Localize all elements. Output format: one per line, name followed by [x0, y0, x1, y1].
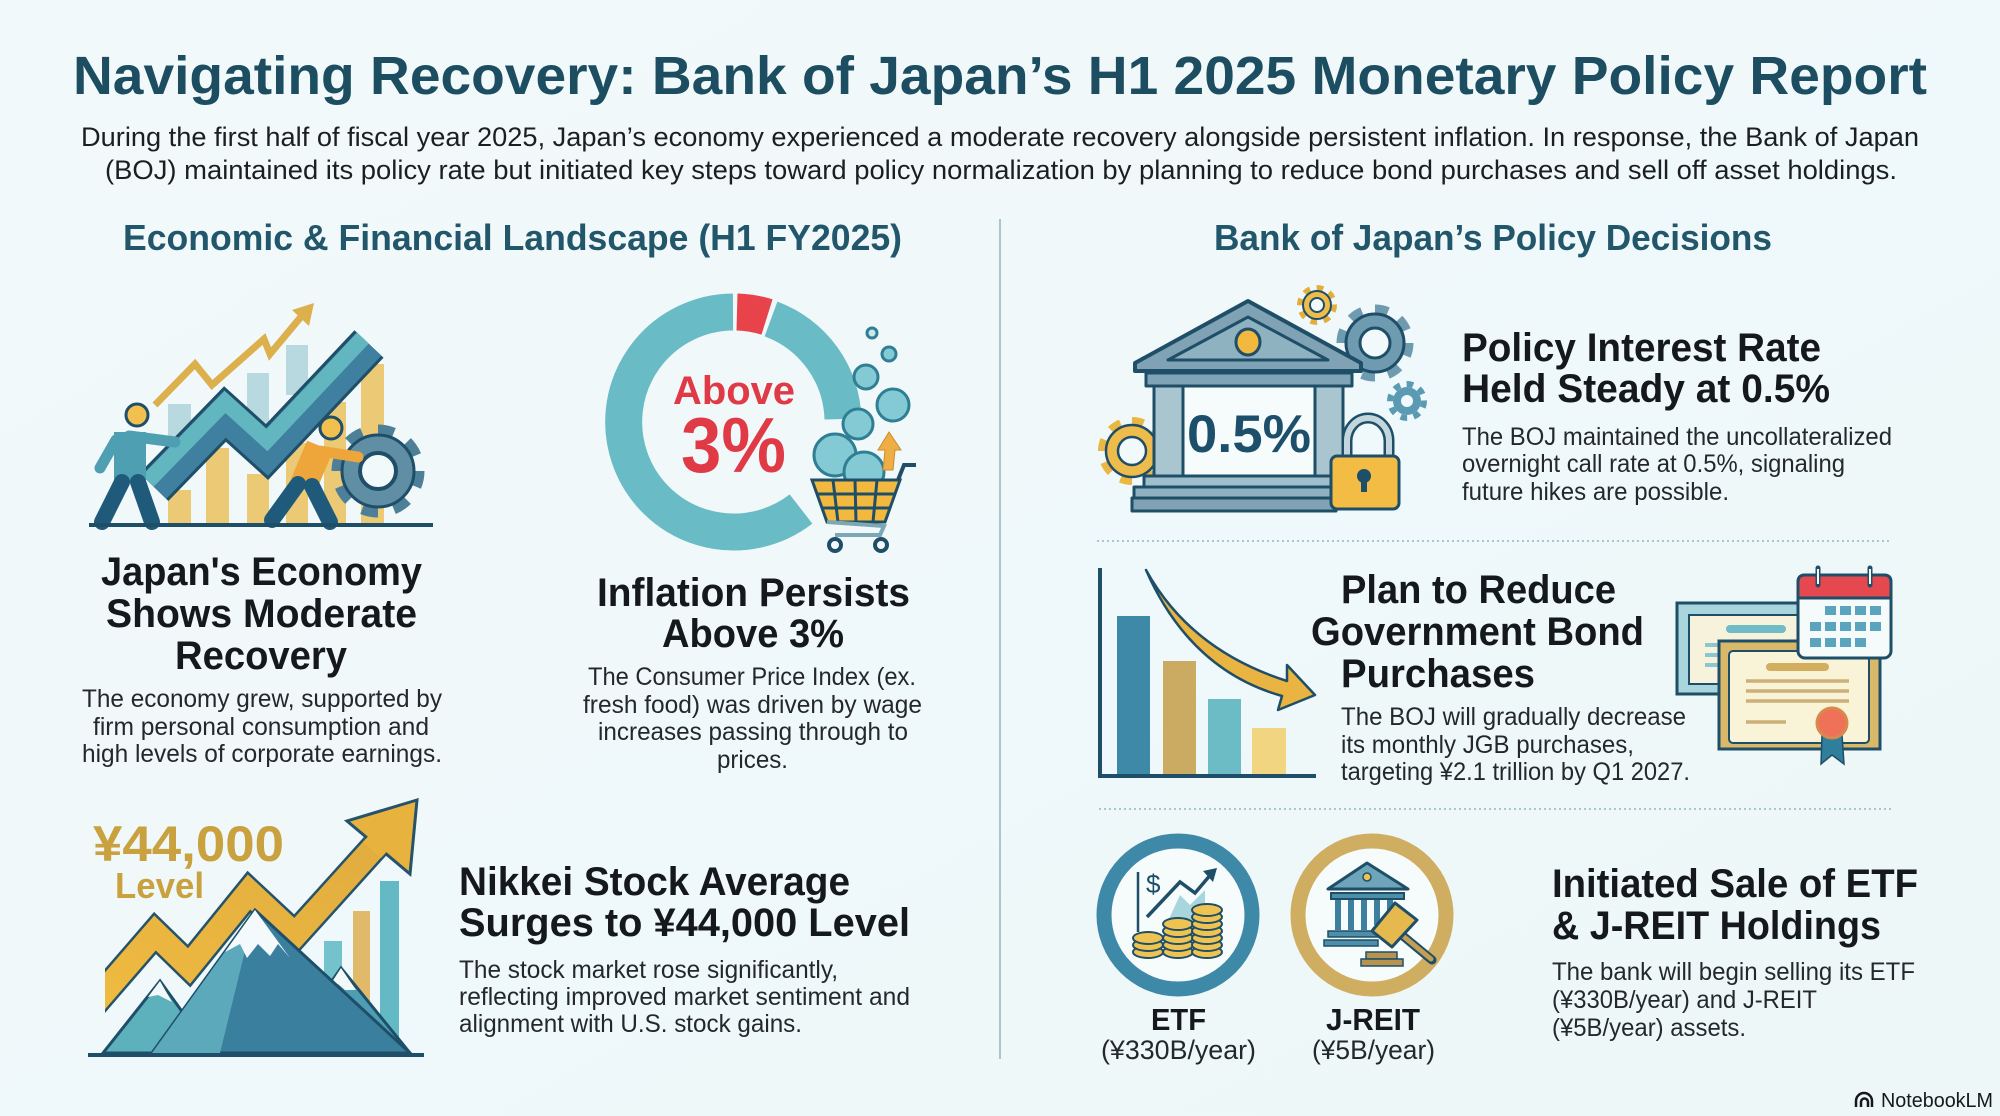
heading: bond purchases: Plan to Reduce — [1341, 568, 1616, 612]
body text: Nikkei: reflecting improved market sentiment and — [459, 983, 910, 1011]
rate value: 0.5% — [1187, 405, 1311, 464]
value label: ¥44,000 level — [93, 816, 284, 906]
icon: J-REIT ring — [1298, 841, 1446, 989]
label: ETF — [1101, 1002, 1256, 1065]
icon: ETF ring — [1104, 841, 1252, 989]
gavel — [1361, 903, 1432, 966]
donut chart: above 3%: 3% — [681, 401, 786, 489]
icon: gear — [338, 431, 418, 511]
heading: policy rate: Policy Interest Rate — [1462, 326, 1821, 370]
heading: inflation: Inflation Persists — [597, 571, 910, 615]
body text: inflation: increases passing through to — [598, 718, 908, 746]
calendar — [1798, 568, 1891, 658]
coin stacks — [1133, 904, 1222, 958]
body text: policy rate: The BOJ maintained the uncollateralized — [1462, 423, 1892, 451]
body text: inflation: prices. — [717, 746, 788, 774]
panel: policy rate — [1103, 288, 1892, 511]
heading: economy: Recovery — [175, 634, 348, 678]
body text: economy — [82, 685, 442, 768]
body text: economy: The economy grew, supported by — [82, 685, 442, 713]
icon: bond certificates and calendar — [1677, 568, 1891, 764]
heading: Nikkei — [459, 860, 910, 945]
right section heading: Bank of Japan’s Policy Decisions — [1214, 217, 1772, 258]
icon: ETF ring: $ — [1146, 869, 1161, 899]
panel: bond purchases — [1100, 568, 1891, 786]
label: J-REIT: (¥5B/year) — [1312, 1035, 1435, 1065]
small blue gear — [1390, 384, 1424, 418]
heading: bond purchases: Purchases — [1341, 652, 1535, 696]
donut chart: above 3%: Above — [673, 369, 795, 413]
person pushing the arrow — [100, 404, 175, 522]
label: ETF: ETF — [1151, 1002, 1206, 1037]
panel: economy recovery — [82, 303, 442, 768]
panel: ETF and J-REIT sale — [1101, 841, 1918, 1065]
heading: asset sale: & J-REIT Holdings — [1552, 904, 1881, 948]
heading: asset sale: Initiated Sale of ETF — [1552, 862, 1918, 906]
body text: policy rate: future hikes are possible. — [1462, 478, 1729, 506]
donut chart: above 3% — [624, 312, 843, 532]
small gold gear — [1300, 288, 1334, 322]
body text: asset sale: (¥5B/year) assets. — [1552, 1014, 1746, 1042]
body text: asset sale: (¥330B/year) and J-REIT — [1552, 986, 1817, 1014]
body text: Nikkei: alignment with U.S. stock gains. — [459, 1010, 802, 1038]
person pushing the gear — [272, 417, 358, 522]
heading: economy — [101, 550, 423, 678]
body text: Nikkei: The stock market rose significantly, — [459, 956, 838, 984]
heading: asset sale — [1552, 862, 1918, 948]
value label: ¥44,000 level: ¥44,000 — [93, 816, 284, 872]
heading: Nikkei: Nikkei Stock Average — [459, 860, 850, 904]
icon: mountains and rising arrow — [85, 800, 424, 1055]
intro paragraph: During the first half of fiscal year 2025, Japan’s economy experienced a moderate recovery alongside persistent inflation. In response, the Bank of Japan — [81, 122, 1919, 152]
title: Navigating Recovery: Bank of Japan’s H1 2025 Monetary Policy Report — [73, 46, 1927, 106]
body text: policy rate — [1462, 423, 1892, 506]
icon: padlock — [1331, 418, 1399, 509]
icon: shopping cart with rising bubbles — [812, 328, 916, 551]
heading: economy: Shows Moderate — [106, 592, 417, 636]
body text: bond purchases: The BOJ will gradually decrease — [1341, 703, 1686, 731]
intro paragraph — [81, 122, 1919, 185]
chart: declining purchases — [1100, 568, 1316, 776]
body text: asset sale: The bank will begin selling its ETF — [1552, 958, 1915, 986]
panel: Nikkei — [85, 800, 910, 1055]
body text: policy rate: overnight call rate at 0.5%, signaling — [1462, 450, 1845, 478]
heading: policy rate — [1462, 326, 1830, 411]
large blue gear — [1342, 310, 1408, 376]
body text: bond purchases: its monthly JGB purchases, — [1341, 731, 1634, 759]
label: J-REIT: J-REIT — [1326, 1002, 1420, 1037]
heading: inflation — [597, 571, 910, 656]
arrow: downward trend — [1146, 570, 1315, 710]
intro paragraph: (BOJ) maintained its policy rate but initiated key steps toward policy normalization by planning to reduce bond purchases and sell off asset holdings. — [105, 155, 1897, 185]
body text: inflation: fresh food) was driven by wage — [583, 691, 922, 719]
heading: economy: Japan's Economy — [101, 550, 423, 594]
body text: inflation — [583, 663, 922, 774]
icon: growth chart with workers — [89, 303, 433, 525]
body text: Nikkei — [459, 956, 910, 1038]
heading: inflation: Above 3% — [662, 612, 844, 656]
heading: bond purchases: Government Bond — [1311, 610, 1644, 654]
body text: asset sale — [1552, 958, 1915, 1042]
label: ETF: (¥330B/year) — [1101, 1035, 1256, 1065]
panel: inflation — [583, 312, 922, 774]
watermark: NotebookLM: NotebookLM — [1881, 1090, 1993, 1112]
heading: Nikkei: Surges to ¥44,000 Level — [459, 901, 910, 945]
gold gear left — [1103, 422, 1161, 480]
body text: economy: high levels of corporate earnings. — [82, 740, 442, 768]
heading: policy rate: Held Steady at 0.5% — [1462, 367, 1830, 411]
label: J-REIT — [1312, 1002, 1435, 1065]
body text: bond purchases — [1341, 703, 1690, 786]
left section heading: Economic & Financial Landscape (H1 FY2025) — [123, 217, 902, 258]
body text: bond purchases: targeting ¥2.1 trillion by Q1 2027. — [1341, 758, 1690, 786]
body text: economy: firm personal consumption and — [93, 713, 429, 741]
value label: ¥44,000 level: Level — [115, 865, 204, 906]
icon: central bank with gears and lock — [1103, 288, 1424, 511]
body text: inflation: The Consumer Price Index (ex. — [588, 663, 916, 691]
heading: bond purchases — [1311, 568, 1644, 696]
